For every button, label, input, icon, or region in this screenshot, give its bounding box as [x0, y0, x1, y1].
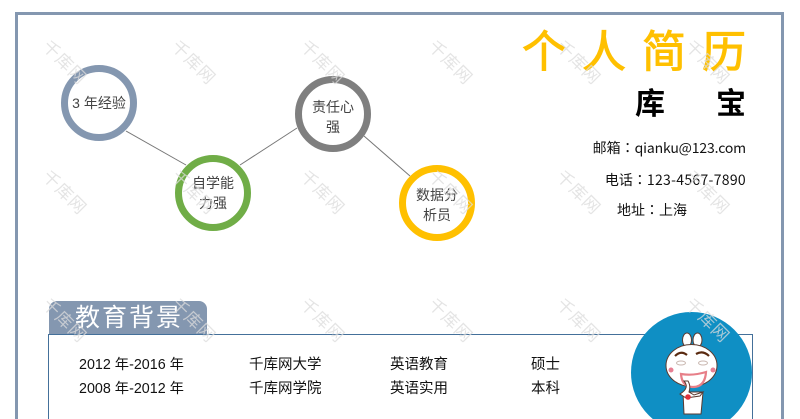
section heading text: 教育背景: [75, 304, 183, 332]
skill circle: experience: [61, 65, 137, 141]
skill circle: experience: 3 年经验: [72, 95, 126, 111]
education row 1: 硕士: [531, 357, 560, 373]
avatar: cartoon bunny on blue circle: [631, 312, 752, 419]
watermark layer: 千库网: [39, 167, 90, 218]
watermark layer: 千库网: [682, 167, 733, 218]
name: 库: [635, 88, 665, 121]
watermark layer: 千库网: [39, 37, 90, 88]
watermark layer: 千库网: [297, 167, 348, 218]
skill circle: data analyst: 数据分析员: [416, 186, 458, 223]
watermark layer: 千库网: [682, 37, 733, 88]
education row 1: 英语教育: [390, 357, 448, 373]
watermark layer: 千库网: [553, 295, 604, 346]
email: 邮箱：qianku@123.com: [593, 138, 746, 158]
skill circle: responsibility: 责任心强: [312, 98, 354, 135]
watermark layer: 千库网: [297, 37, 348, 88]
education row 1: [79, 356, 560, 373]
watermark layer: 千库网: [39, 295, 90, 346]
watermark layer: 千库网: [168, 295, 219, 346]
watermark layer: 千库网: [682, 295, 733, 346]
watermark layer: 千库网: [425, 37, 476, 88]
skill circle: responsibility: [295, 76, 371, 152]
address: 地址：上海: [617, 200, 687, 220]
name: 宝: [716, 88, 746, 121]
education row 1: 2012 年-2016 年: [79, 357, 184, 373]
education row 2: 本科: [531, 381, 560, 397]
skill circle: data analyst: [399, 165, 475, 241]
watermark layer: 千库网: [168, 167, 219, 218]
education row 2: 2008 年-2012 年: [79, 381, 184, 397]
phone: 电话：123-4567-7890: [605, 170, 746, 190]
skill circle: self-learning: 自学能力强: [192, 174, 234, 211]
watermark layer: 千库网: [297, 295, 348, 346]
watermark layer: 千库网: [425, 167, 476, 218]
education row 2: [79, 380, 560, 397]
education row 2: 千库网学院: [249, 381, 322, 397]
education row 2: 英语实用: [390, 381, 448, 397]
watermark layer: 千库网: [168, 37, 219, 88]
name: [635, 88, 746, 121]
education section heading tab: [49, 301, 207, 334]
watermark layer: 千库网: [553, 37, 604, 88]
watermark layer: 千库网: [553, 167, 604, 218]
skill circle: self-learning: [175, 155, 251, 231]
watermark layer: 千库网: [425, 295, 476, 346]
title: 个人简历: [522, 16, 762, 80]
education box: [48, 334, 753, 419]
education row 1: 千库网大学: [249, 357, 322, 373]
